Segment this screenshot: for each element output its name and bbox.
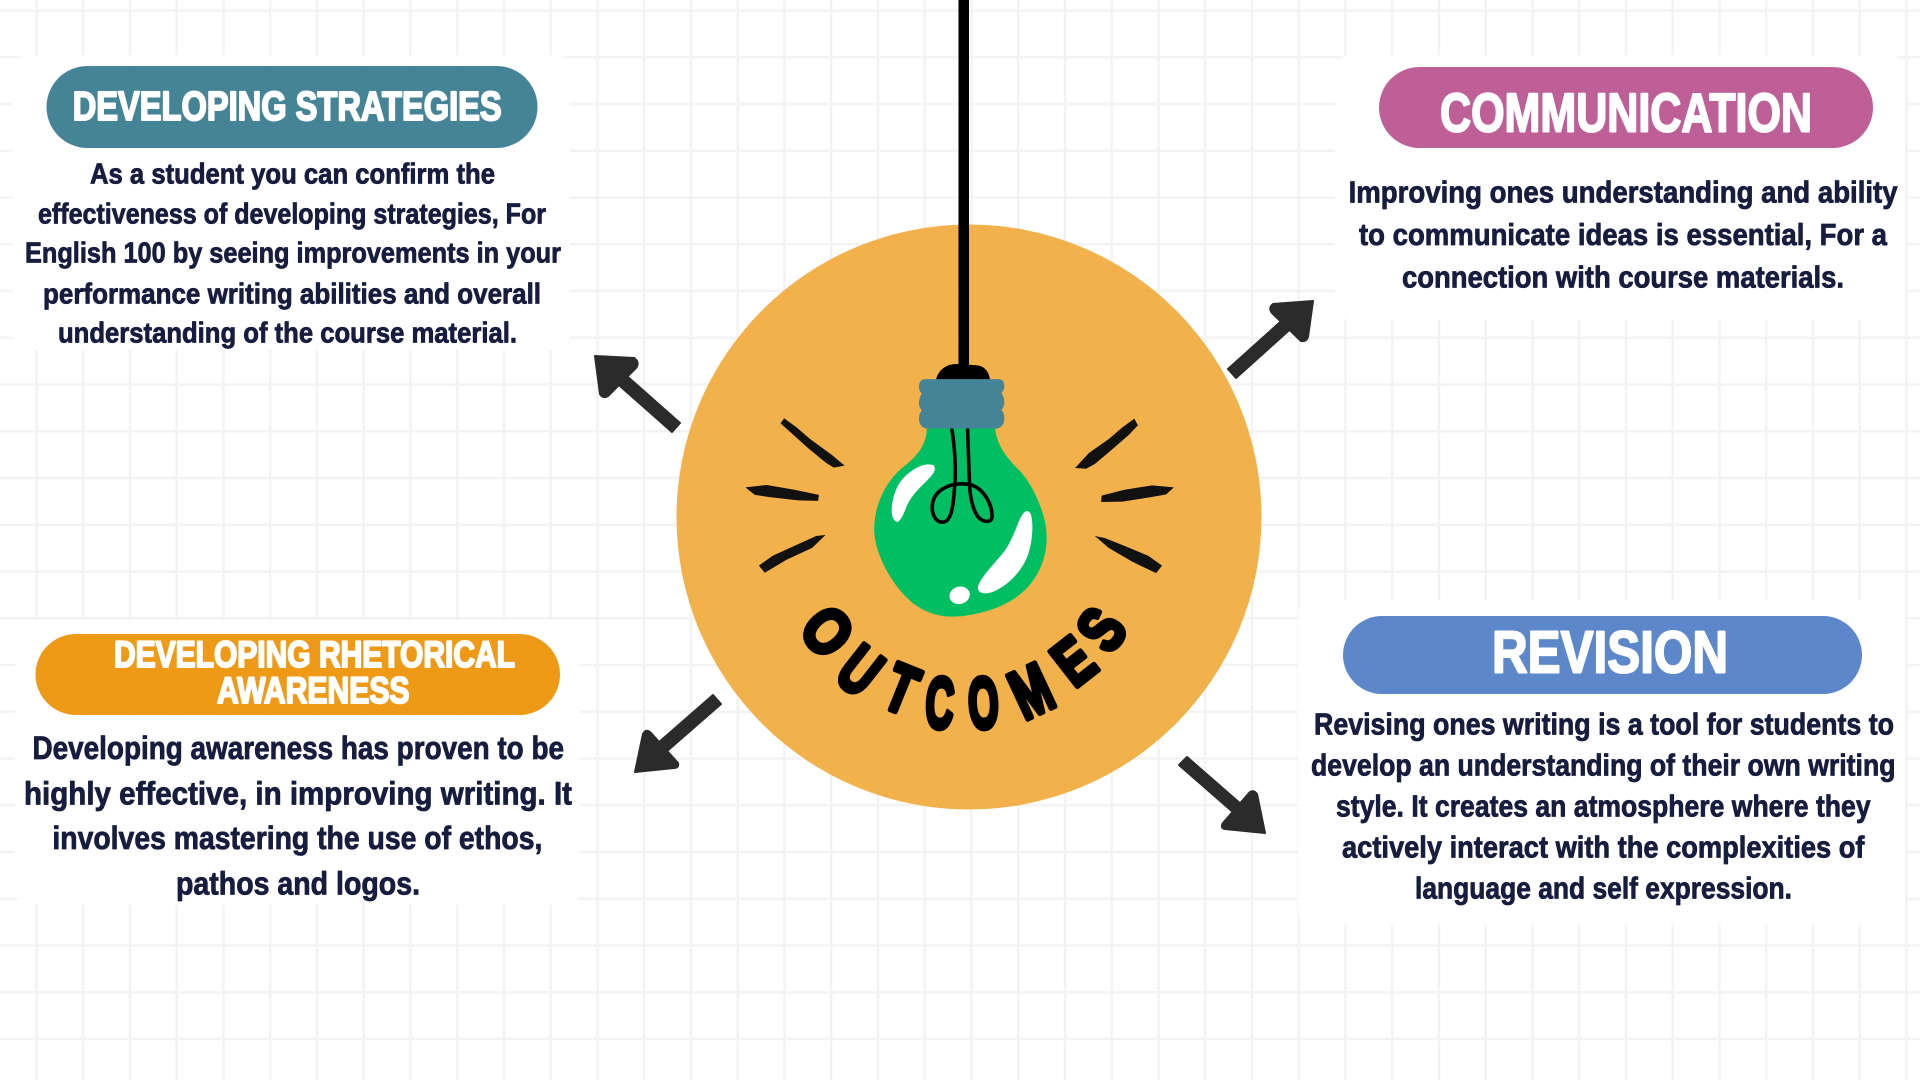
text block: developing strategies: English 100 by seeing improvements in your (25, 238, 561, 270)
curved title: outcomes: O (966, 664, 1001, 745)
text block: communication: connection with course materials. (1402, 260, 1844, 295)
heading pill: revision: REVISION (1492, 620, 1728, 686)
heading pill: developing strategies (46, 66, 538, 148)
text block: developing strategies: performance writing abilities and overall (43, 278, 541, 310)
heading pill: developing rhetorical awareness: AWARENESS (217, 670, 410, 711)
arrow: to revision (1179, 757, 1265, 833)
text block: developing rhetorical awareness: highly effective, in improving writing. It (24, 775, 572, 811)
text block: developing rhetorical awareness: involves mastering the use of ethos, (52, 820, 542, 856)
text block: developing rhetorical awareness: pathos and logos. (176, 865, 420, 901)
text block: revision: language and self expression. (1415, 870, 1792, 905)
heading pill: developing rhetorical awareness (36, 634, 560, 715)
heading pill: communication: COMMUNICATION (1440, 82, 1812, 144)
text block: developing strategies: As a student you can confirm the (90, 158, 495, 190)
text block: developing strategies (25, 158, 561, 350)
arrow: to developing rhetorical awareness (635, 695, 721, 772)
hanging cord (958, 0, 969, 372)
curved title: outcomes: O (786, 592, 868, 671)
icon: light bulb (874, 364, 1047, 617)
heading pill: developing strategies: DEVELOPING STRATEGIES (73, 83, 502, 129)
curved title: outcomes: T (874, 649, 929, 730)
curved title: outcomes: C (923, 664, 957, 745)
text block: developing strategies: effectiveness of developing strategies, For (38, 198, 546, 230)
curved title: outcomes: M (998, 649, 1065, 734)
heading pill: communication (1379, 67, 1873, 148)
text block: developing rhetorical awareness: Developing awareness has proven to be (32, 730, 564, 766)
arrow: to developing strategies (595, 356, 680, 432)
icon: light rays (745, 418, 1174, 573)
curved title: outcomes: E (1039, 623, 1109, 700)
central orange circle (676, 224, 1262, 810)
panel: communication (1335, 55, 1905, 320)
text block: revision: actively interact with the complexities of (1342, 829, 1865, 864)
panel: developing rhetorical awareness (15, 620, 580, 905)
curved title: outcomes: S (1063, 596, 1141, 664)
arrow: to communication (1228, 301, 1313, 378)
text block: developing strategies: understanding of the course material. (58, 318, 517, 350)
text block: communication (1349, 175, 1898, 295)
text block: revision (1311, 706, 1896, 905)
panel: revision (1298, 600, 1905, 925)
heading pill: developing rhetorical awareness: DEVELOPING RHETORICAL (114, 634, 515, 675)
curved title: outcomes (786, 592, 1141, 745)
text block: developing rhetorical awareness (24, 730, 572, 901)
panel: developing strategies (13, 55, 570, 350)
heading pill: revision (1343, 616, 1862, 694)
curved title: outcomes: U (823, 631, 896, 711)
